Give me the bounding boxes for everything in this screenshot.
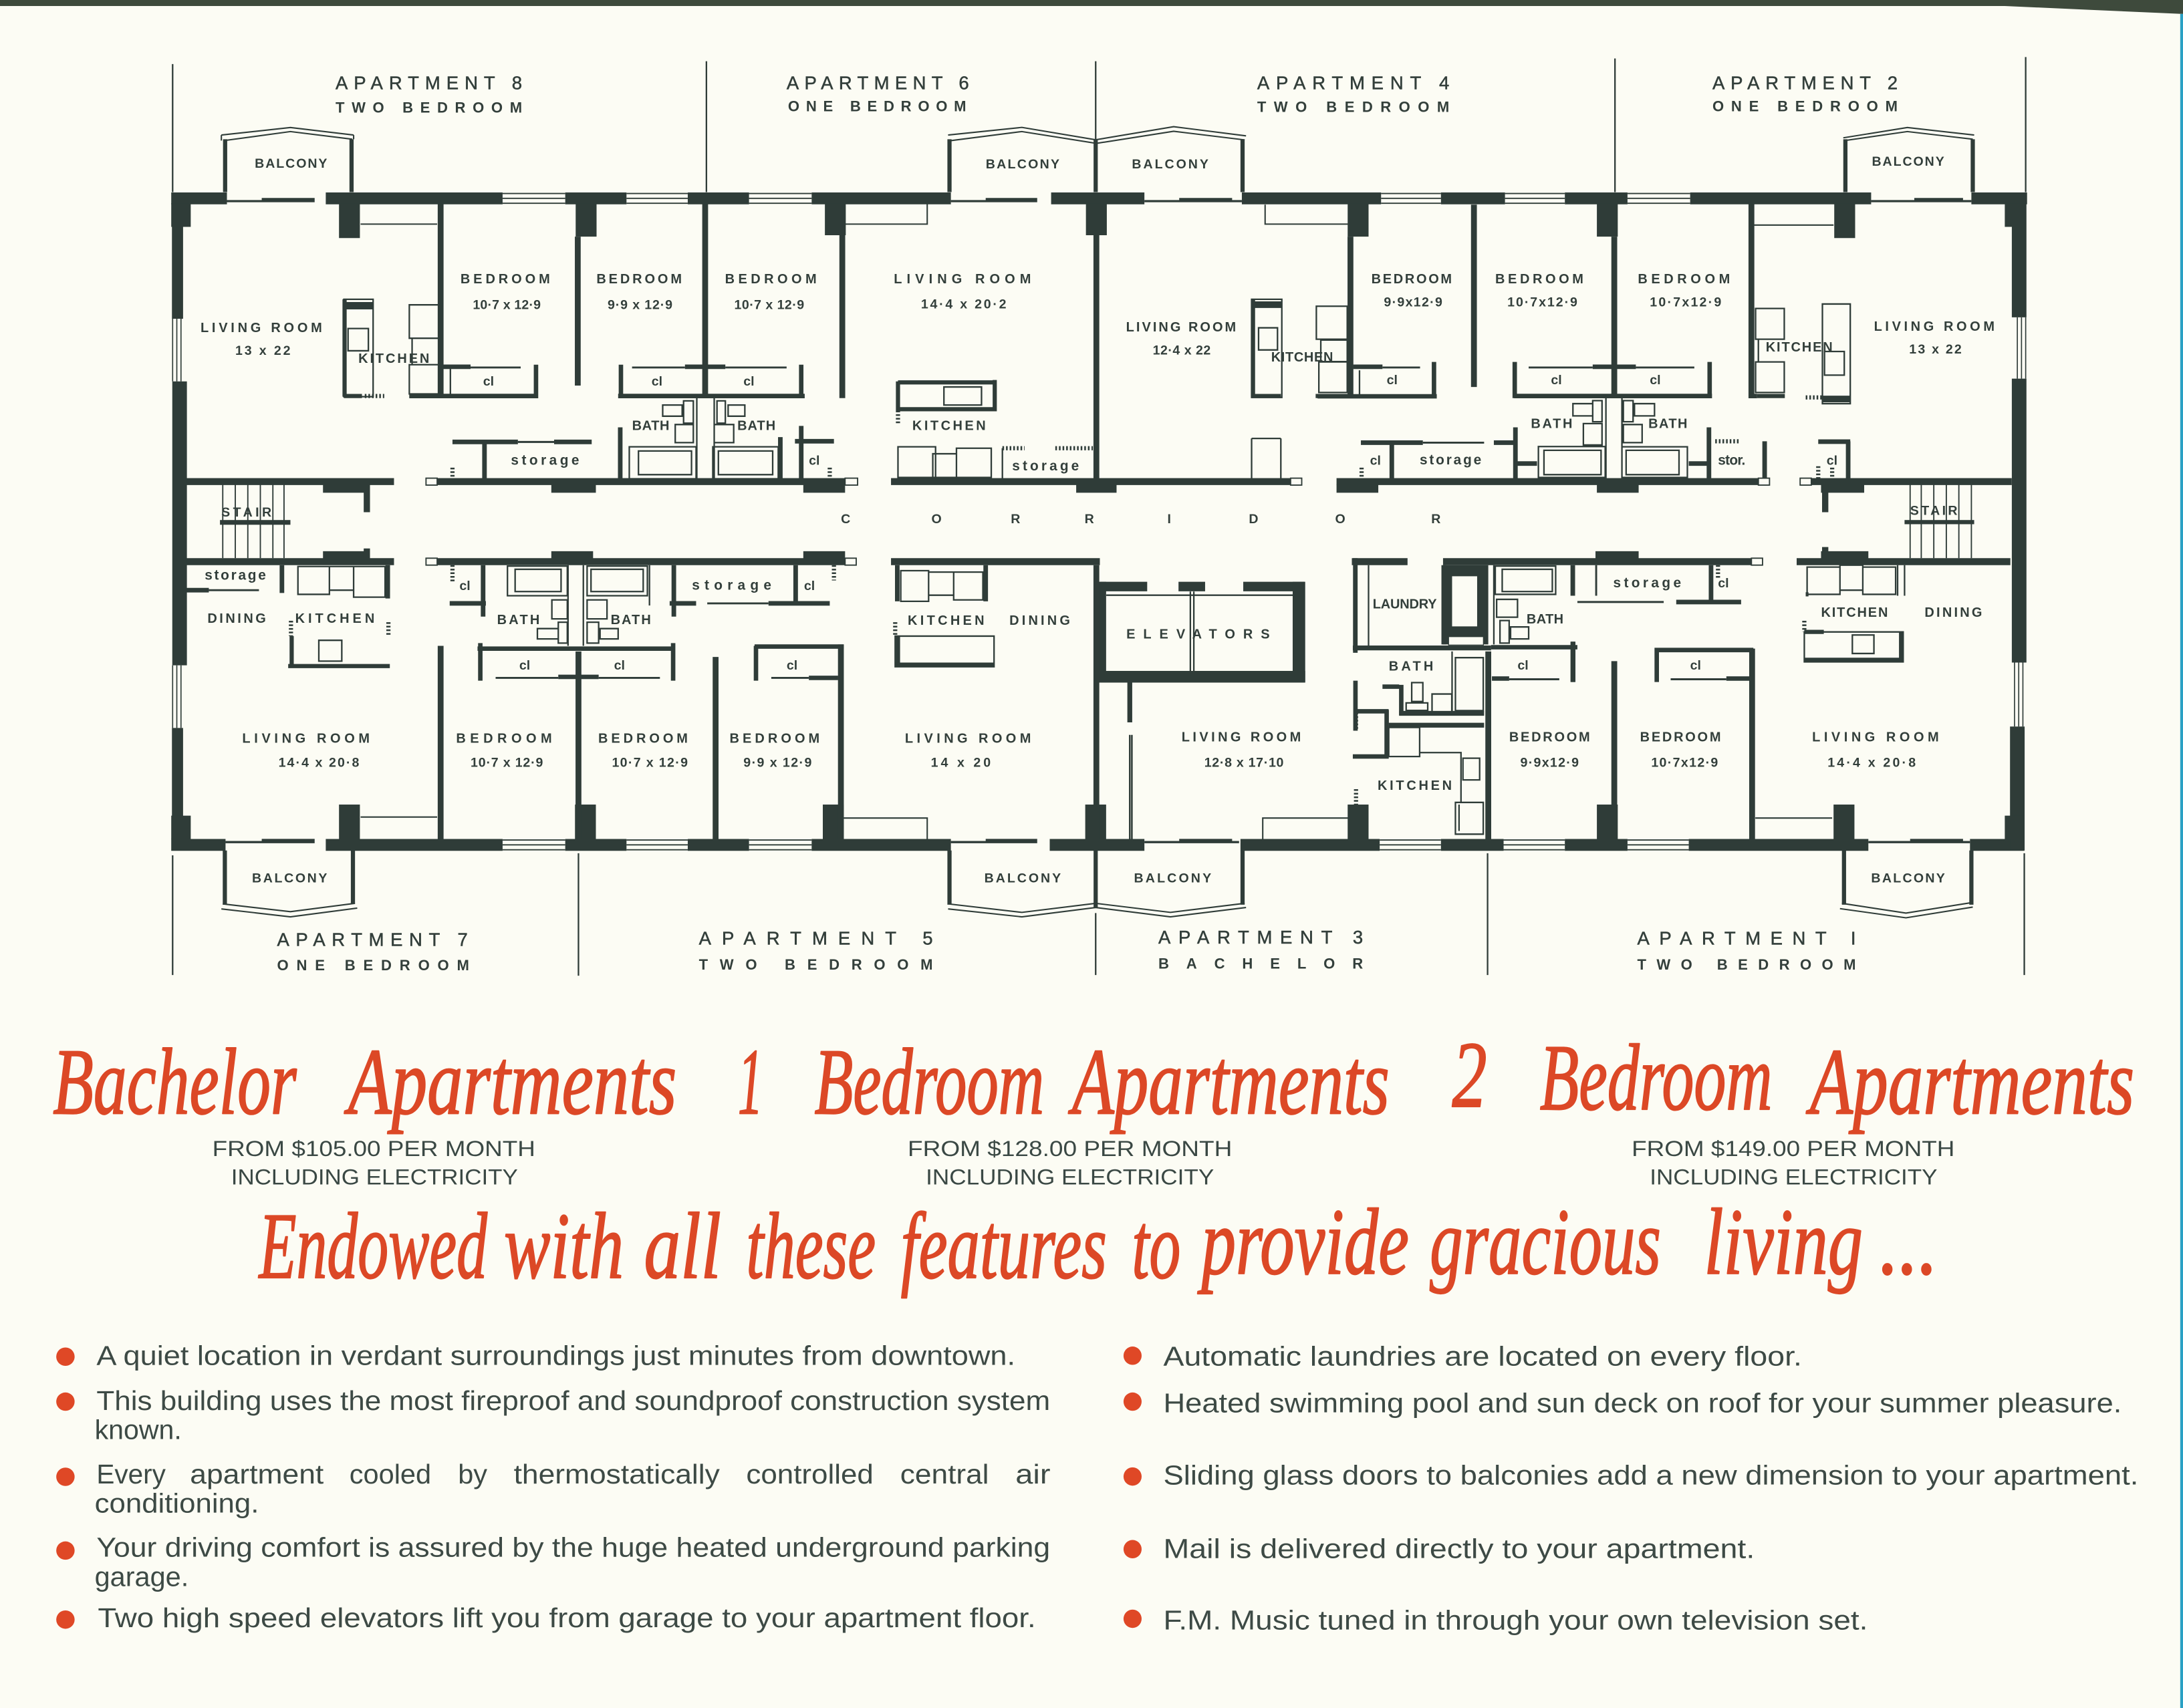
kitchen and bath fixtures <box>298 299 1904 834</box>
windows <box>503 194 1690 850</box>
room labels: apartment 7: storage <box>205 568 266 583</box>
room labels: apartment 6: BEDROOM <box>725 272 817 287</box>
room labels: apartment 1: cl <box>1690 658 1701 673</box>
balcony: apartment 2 <box>1845 139 1972 192</box>
heading: bachelor apartments: Apartments <box>344 1029 676 1134</box>
room labels: apartment 4: cl <box>1551 373 1562 388</box>
room labels: apartment 3: KITCHEN <box>1378 778 1452 793</box>
room labels: apartment 1: 14·4 x 20·8 <box>1827 756 1916 770</box>
room labels: apartment 5: BATH <box>611 613 651 627</box>
stair labels: STAIR <box>221 505 271 520</box>
heading: endowed with all these features: gracious <box>1430 1189 1661 1294</box>
balcony: apartments 5 and 3 <box>950 851 1243 907</box>
room labels: apartment 8: cl <box>652 374 662 389</box>
room labels: apartment 8: KITCHEN <box>358 351 429 366</box>
room labels: apartment 2: BATH <box>1648 417 1687 432</box>
balcony rail: apartment 2 <box>1843 128 1974 140</box>
heading: apartment 5: APARTMENT 5 <box>699 928 933 948</box>
room labels: apartment 7: KITCHEN <box>295 611 374 626</box>
room labels: apartment 6: 10·7 x 12·9 <box>735 297 804 312</box>
room labels: apartment 7: DINING <box>207 611 266 626</box>
heading: bachelor apartments: Bachelor <box>53 1029 297 1134</box>
door springs <box>291 396 1832 805</box>
room labels: apartment 4: BEDROOM <box>1372 272 1452 287</box>
room labels: apartment 2: KITCHEN <box>1766 340 1833 355</box>
room labels: apartment 8 <box>201 272 819 468</box>
heading: apartment 2: APARTMENT 2 <box>1712 72 1898 93</box>
room labels: apartment 6: 14·4 x 20·2 <box>921 297 1007 312</box>
room labels: apartment 7 <box>205 568 552 770</box>
price: one bedroom <box>908 1137 1232 1189</box>
bullet item: FM music: F.M. Music tuned in through your own television set. <box>1163 1604 1868 1635</box>
room labels: apartment 1: 9·9x12·9 <box>1521 756 1579 770</box>
room labels: apartment 5 <box>598 578 1070 770</box>
heading: apartment 3: BACHELOR <box>1158 956 1363 972</box>
room labels: apartment 5: KITCHEN <box>908 613 985 628</box>
balcony labels: BALCONY <box>252 871 327 886</box>
balcony labels: BALCONY <box>255 156 327 171</box>
room labels: apartment 4 <box>1126 272 1583 468</box>
balcony: apartment 8 <box>225 139 352 192</box>
bullet item: underground parking: garage. <box>95 1561 188 1592</box>
heading: endowed with all these features: these <box>746 1193 876 1298</box>
bullet item: central air conditioning: thermostatically <box>514 1459 721 1489</box>
room labels: apartment 1: BATH <box>1527 612 1563 627</box>
room labels: apartment 5: storage <box>692 578 771 593</box>
heading: apartment 1: TWO BEDROOM <box>1637 956 1856 973</box>
bullet item: underground parking: Your driving comfort is assured by the huge heated underground parking <box>96 1532 1050 1562</box>
balcony: apartment 7 <box>225 851 353 905</box>
bachelor bath walls <box>1353 681 1401 757</box>
apartment 3 service core <box>1353 565 1491 757</box>
room labels: apartment 5: BEDROOM <box>598 732 688 746</box>
balcony rail: apartment 8 <box>221 128 354 140</box>
heading: apartment 8: TWO BEDROOM <box>336 100 522 116</box>
storage and bath partitions <box>186 426 1850 682</box>
room labels: apartment 3: 12·8 x 17·10 <box>1204 756 1284 770</box>
bullet item: mail: Mail is delivered directly to your apartment. <box>1163 1534 1755 1564</box>
stair landing east <box>1904 520 1974 524</box>
bullet item: central air conditioning: by <box>458 1459 488 1489</box>
room labels: apartment 1: cl <box>1718 576 1729 591</box>
room labels: apartment 8: BEDROOM <box>596 272 682 287</box>
heading: apartment 1: APARTMENT I <box>1637 928 1856 948</box>
heading: 1 bedroom apartments: Bedroom <box>815 1029 1044 1134</box>
thin partition lines <box>360 203 1833 839</box>
bullet item: central air conditioning: central <box>900 1459 989 1489</box>
corridor label: R <box>1085 512 1094 527</box>
room labels: apartment 5: LIVING ROOM <box>905 732 1031 746</box>
room labels: apartment 5: cl <box>787 658 797 673</box>
room labels: apartment 7: cl <box>519 658 530 673</box>
room labels: apartment 5: 9·9 x 12·9 <box>743 756 811 770</box>
room labels: apartment 1: cl <box>1517 658 1529 673</box>
room labels: apartment 1: DINING <box>1924 605 1982 620</box>
price: bachelor <box>213 1137 535 1189</box>
balconies <box>221 127 1974 918</box>
room labels: apartment 1: BEDROOM <box>1640 730 1720 744</box>
apartment divider lines <box>172 57 2026 976</box>
heading: endowed with all these features: Endowed <box>258 1193 488 1298</box>
room labels: apartment 2: BEDROOM <box>1638 272 1730 287</box>
bullet item: fireproof construction: known. <box>95 1414 182 1445</box>
heading: apartment 4: TWO BEDROOM <box>1257 99 1449 116</box>
heading: endowed with all these features <box>258 1189 1938 1298</box>
room labels: apartment 4: cl <box>1370 454 1381 468</box>
heading: 2 bedroom apartments: 2 <box>1452 1022 1487 1127</box>
bullet item: central air conditioning: cooled <box>350 1459 431 1489</box>
room labels: apartment 7: cl <box>459 579 471 593</box>
bullet item: central air conditioning: air <box>1015 1459 1051 1489</box>
room labels: apartment 3 <box>1182 597 1452 793</box>
room labels: apartment 1: KITCHEN <box>1821 605 1888 620</box>
room labels: apartment 2: cl <box>1827 454 1837 468</box>
stair treads east <box>1910 484 1971 558</box>
bullet item: central air conditioning: conditioning. <box>95 1487 259 1518</box>
stair labels <box>221 504 1958 520</box>
room labels: apartment 8: 9·9 x 12·9 <box>608 297 672 312</box>
heading: apartment 1 <box>1638 928 1856 973</box>
room labels: apartment 8: storage <box>511 453 579 468</box>
room labels: apartment 6: cl <box>743 374 755 389</box>
heading: endowed with all these features: to <box>1132 1193 1180 1298</box>
heading: apartment 5 <box>699 928 933 973</box>
room labels: apartment 7: BEDROOM <box>456 732 552 746</box>
panel: floor plan <box>171 57 2027 976</box>
room labels: apartment 4: 10·7x12·9 <box>1507 295 1577 309</box>
room labels: apartment 1: storage <box>1613 575 1681 591</box>
room labels: apartment 4: LIVING ROOM <box>1126 320 1236 335</box>
heading: apartment 8: APARTMENT 8 <box>336 72 522 93</box>
heading: bachelor apartments <box>53 1029 676 1134</box>
heading: endowed with all these features: living <box>1704 1189 1863 1294</box>
heading: apartment 8 <box>336 72 522 116</box>
bullet item: fireproof construction: This building uses the most fireproof and soundproof construction system <box>96 1385 1050 1416</box>
room labels: apartment 7: LIVING ROOM <box>242 732 370 746</box>
elevators label: ELEVATORS <box>1126 627 1270 642</box>
heading: endowed with all these features: with <box>504 1193 624 1298</box>
bullet item: central air conditioning: Every <box>96 1459 166 1489</box>
stair treads west <box>223 484 284 558</box>
heading: apartment 2: ONE BEDROOM <box>1712 98 1898 115</box>
room labels: apartment 8: 10·7 x 12·9 <box>473 297 541 312</box>
room labels: apartment 6: storage <box>1012 458 1079 474</box>
room labels: apartment 5: 10·7 x 12·9 <box>612 756 688 770</box>
closets: bottom row <box>477 642 1753 682</box>
balcony labels: BALCONY <box>1872 154 1944 169</box>
balcony labels: BALCONY <box>1871 871 1945 886</box>
heading: apartment 7: ONE BEDROOM <box>277 957 469 974</box>
elevator shaft <box>1096 582 1305 839</box>
feature list: right column <box>1124 1340 2138 1635</box>
room labels: apartment 4: storage <box>1420 452 1481 468</box>
room labels: apartment 5: BEDROOM <box>729 732 819 746</box>
room labels: apartment 5: DINING <box>1009 613 1070 628</box>
corridor label <box>841 512 1440 527</box>
corridor label: R <box>1431 512 1440 527</box>
heading: endowed with all these features: features <box>901 1193 1107 1298</box>
corridor label: O <box>1335 512 1345 527</box>
balcony rail: apartment 7 <box>221 903 357 917</box>
corridor label: O <box>931 512 942 527</box>
balcony rail: apartment 1 <box>1840 903 1972 918</box>
heading: apartment 5: TWO BEDROOM <box>699 956 933 973</box>
room labels: apartment 2: stor. <box>1718 453 1745 468</box>
room labels: apartment 4: BATH <box>1531 417 1572 432</box>
cyan right edge of page <box>2180 14 2183 1708</box>
balcony labels: BALCONY <box>986 157 1059 172</box>
room labels: apartment 5: 14 x 20 <box>931 756 991 770</box>
feature list: left column <box>56 1340 1051 1633</box>
room labels: apartment 2: 13 x 22 <box>1909 342 1962 357</box>
bullet item: central air conditioning: controlled <box>746 1459 874 1489</box>
price: one bedroom: FROM $128.00 PER MONTH <box>908 1137 1232 1161</box>
stairs <box>220 484 1974 558</box>
balcony labels: BALCONY <box>985 871 1061 886</box>
bullet item: underground parking <box>56 1532 1050 1592</box>
heading: apartment 4: APARTMENT 4 <box>1257 72 1449 93</box>
dark top edge of page <box>0 0 2183 14</box>
room labels: apartment 6: BATH <box>737 419 775 434</box>
heading: apartment 6 <box>787 72 969 115</box>
heading: apartment 3: APARTMENT 3 <box>1158 927 1363 948</box>
room labels: apartment 7: 14·4 x 20·8 <box>279 756 359 770</box>
balcony labels <box>252 154 1945 886</box>
balcony: apartment 1 <box>1844 851 1971 905</box>
balcony labels: BALCONY <box>1132 157 1208 172</box>
heading: endowed with all these features: all <box>644 1193 721 1298</box>
stair landing west <box>220 520 290 525</box>
room labels: apartment 3: LAUNDRY <box>1373 597 1437 611</box>
bullet item: fireproof construction <box>56 1385 1050 1445</box>
room labels: apartment 4: 12·4 x 22 <box>1153 343 1210 358</box>
price: two bedroom: FROM $149.00 PER MONTH <box>1632 1137 1954 1161</box>
room labels: apartment 6 <box>725 272 1079 474</box>
laundry and shaft block <box>1353 648 1491 725</box>
heading: apartment 2 <box>1712 72 1898 115</box>
closet sliding doors <box>471 368 1726 679</box>
heading: apartment 7: APARTMENT 7 <box>277 930 468 950</box>
room labels: apartment 1: BEDROOM <box>1509 730 1590 744</box>
room labels: apartment 7: BATH <box>497 613 539 627</box>
room labels: apartment 3: BATH <box>1389 660 1433 674</box>
room labels: apartment 8: cl <box>809 454 819 468</box>
bullet item: central air conditioning: apartment <box>190 1459 324 1489</box>
room labels: apartment 8: BEDROOM <box>461 272 550 287</box>
room labels: apartment 1: 10·7x12·9 <box>1651 756 1718 770</box>
heading: 2 bedroom apartments <box>1452 1022 2134 1134</box>
room labels: apartment 4: 9·9x12·9 <box>1384 295 1442 309</box>
heading: apartment 6: APARTMENT 6 <box>787 72 969 93</box>
closets: top row <box>409 362 1757 398</box>
corridor label: R <box>1011 512 1020 527</box>
heading: apartment 4 <box>1257 72 1449 116</box>
sliding balcony doors <box>225 199 1971 842</box>
heading: 1 bedroom apartments <box>738 1029 1390 1134</box>
room labels: apartment 2: LIVING ROOM <box>1874 319 1995 334</box>
price: one bedroom: INCLUDING ELECTRICITY <box>926 1165 1214 1189</box>
room labels: apartment 3: LIVING ROOM <box>1182 730 1301 744</box>
heading: 1 bedroom apartments: Apartments <box>1068 1029 1390 1134</box>
room labels: apartment 8: 13 x 22 <box>235 343 291 358</box>
room labels: apartment 2 <box>1638 272 1995 468</box>
room labels: apartment 2: 10·7x12·9 <box>1650 295 1721 309</box>
room labels: apartment 5: cl <box>804 579 815 593</box>
heading: endowed with all these features: ... <box>1880 1189 1938 1294</box>
room labels: apartment 5: cl <box>614 658 625 673</box>
corridor door boxes <box>426 478 1811 565</box>
stair labels: STAIR <box>1910 504 1958 519</box>
room labels: apartment 4: KITCHEN <box>1271 350 1333 365</box>
thick counter edges <box>288 299 1903 668</box>
heading: endowed with all these features: provide <box>1197 1189 1409 1294</box>
price: two bedroom <box>1632 1137 1954 1189</box>
heading: apartment 3 <box>1158 927 1363 972</box>
heading: apartment 7 <box>277 930 469 974</box>
room labels: apartment 4: BEDROOM <box>1495 272 1583 287</box>
bullet item: central air conditioning <box>56 1459 1051 1518</box>
bullet item: quiet location: A quiet location in verdant surroundings just minutes from downtown. <box>96 1340 1015 1371</box>
corridor walls <box>186 482 2012 561</box>
corridor label: I <box>1168 512 1171 527</box>
balcony rail: apartments 5 and 3 <box>948 903 1246 917</box>
balcony labels: BALCONY <box>1134 871 1211 886</box>
balcony rail: apartments 6 and 4 <box>948 127 1246 144</box>
heading: 1 bedroom apartments: 1 <box>738 1029 763 1134</box>
price: bachelor: FROM $105.00 PER MONTH <box>213 1137 535 1161</box>
heading: apartment 6: ONE BEDROOM <box>788 98 967 115</box>
room labels: apartment 8: LIVING ROOM <box>201 321 322 335</box>
price: two bedroom: INCLUDING ELECTRICITY <box>1650 1165 1938 1189</box>
corridor label: D <box>1249 512 1259 527</box>
balcony: apartments 6 and 4 <box>950 139 1243 192</box>
heading: 2 bedroom apartments: Bedroom <box>1540 1025 1773 1130</box>
room labels: apartment 4: cl <box>1387 373 1398 388</box>
bullet item: swimming pool: Heated swimming pool and sun deck on roof for your summer pleasure. <box>1163 1387 2122 1418</box>
room labels: apartment 1 <box>1509 575 1982 770</box>
exterior walls <box>171 198 2027 851</box>
price: bachelor: INCLUDING ELECTRICITY <box>231 1165 518 1189</box>
room labels: apartment 8: BATH <box>632 419 669 434</box>
room labels: apartment 6: KITCHEN <box>912 419 986 434</box>
thin door lines <box>209 442 1664 603</box>
room labels: apartment 6: LIVING ROOM <box>894 272 1031 287</box>
bullet item: laundries: Automatic laundries are located on every floor. <box>1163 1340 1802 1371</box>
corridor label: C <box>841 512 850 527</box>
bullet item: sliding glass doors: Sliding glass doors to balconies add a new dimension to your apartment. <box>1163 1460 2138 1491</box>
room labels: apartment 2: cl <box>1650 373 1661 388</box>
interior partitions <box>440 203 1752 839</box>
room labels: apartment 1: LIVING ROOM <box>1812 730 1939 744</box>
room labels: apartment 7: 10·7 x 12·9 <box>471 756 543 770</box>
bullet item: elevators: Two high speed elevators lift you from garage to your apartment floor. <box>98 1602 1036 1633</box>
room labels: apartment 8: cl <box>483 374 494 389</box>
